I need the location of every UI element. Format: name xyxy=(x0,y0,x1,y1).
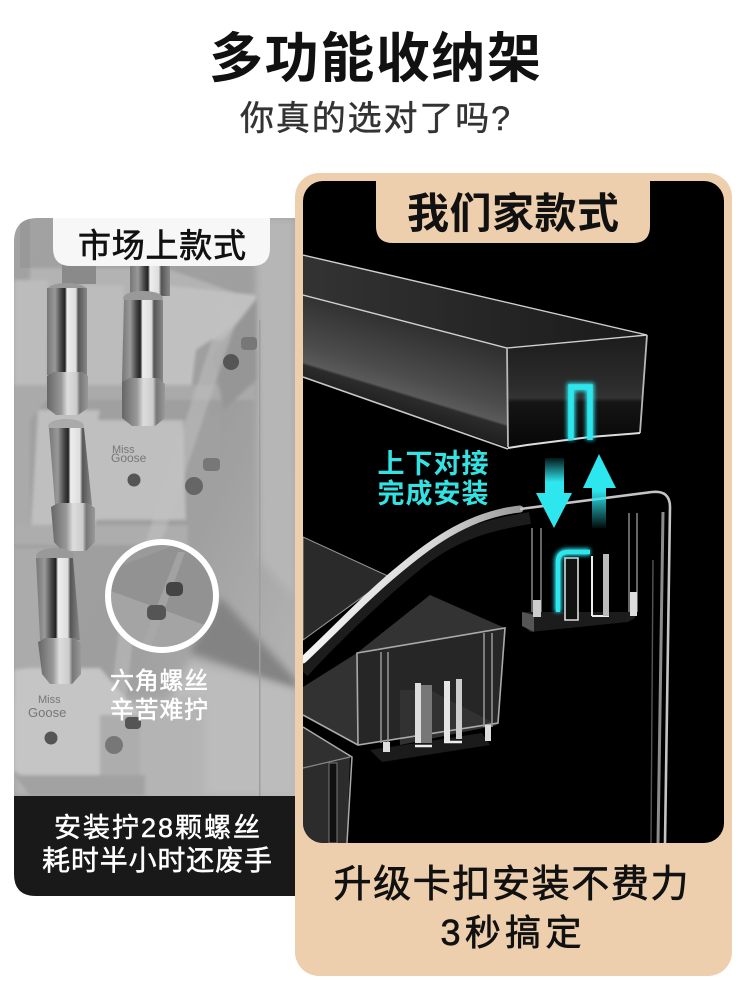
upper clip highlight xyxy=(571,387,590,440)
zoom circle xyxy=(108,542,216,650)
panel: our style xyxy=(295,173,732,976)
middle tray xyxy=(303,595,505,762)
assembly caption: 完成安装 xyxy=(378,479,488,509)
arrow: up xyxy=(583,454,616,528)
cosmetic boxes labels: Miss xyxy=(38,694,61,706)
market caption: 安装拧28颗螺丝 xyxy=(54,813,260,843)
our style caption xyxy=(334,864,688,953)
market tab: 市场上款式 xyxy=(78,227,246,264)
our style caption: 3秒搞定 xyxy=(440,912,582,953)
subtitle: 你真的选对了吗? xyxy=(240,100,510,138)
callout: hex screws: 辛苦难拧 xyxy=(110,697,208,724)
hex screws xyxy=(105,337,257,754)
back tray xyxy=(303,537,390,640)
lipstick bottles xyxy=(20,218,170,684)
our style caption: 升级卡扣安装不费力 xyxy=(334,864,688,906)
market caption xyxy=(42,813,272,876)
our style tab: 我们家款式 xyxy=(407,190,619,237)
upper right clip slot xyxy=(522,513,637,632)
assembly caption: 上下对接 xyxy=(378,449,488,479)
our style tab xyxy=(376,181,650,243)
panel: market style xyxy=(14,218,296,896)
callout: hex screws xyxy=(110,668,208,724)
callout: hex screws: 六角螺丝 xyxy=(110,668,208,695)
cosmetic boxes labels: Goose xyxy=(28,705,66,720)
cosmetic boxes labels xyxy=(28,444,147,744)
assembly caption xyxy=(378,449,488,509)
upper tray xyxy=(303,255,647,449)
curved side panel xyxy=(303,492,670,843)
cosmetic boxes labels: Goose xyxy=(111,451,147,465)
cosmetic boxes labels: Miss xyxy=(112,444,135,456)
product render xyxy=(303,255,670,843)
arrow: down xyxy=(536,458,572,528)
lower tray xyxy=(303,727,352,843)
market caption: 耗时半小时还废手 xyxy=(42,845,272,876)
product photo xyxy=(14,218,296,896)
title: 多功能收纳架 xyxy=(209,29,541,89)
market tab xyxy=(53,218,270,266)
